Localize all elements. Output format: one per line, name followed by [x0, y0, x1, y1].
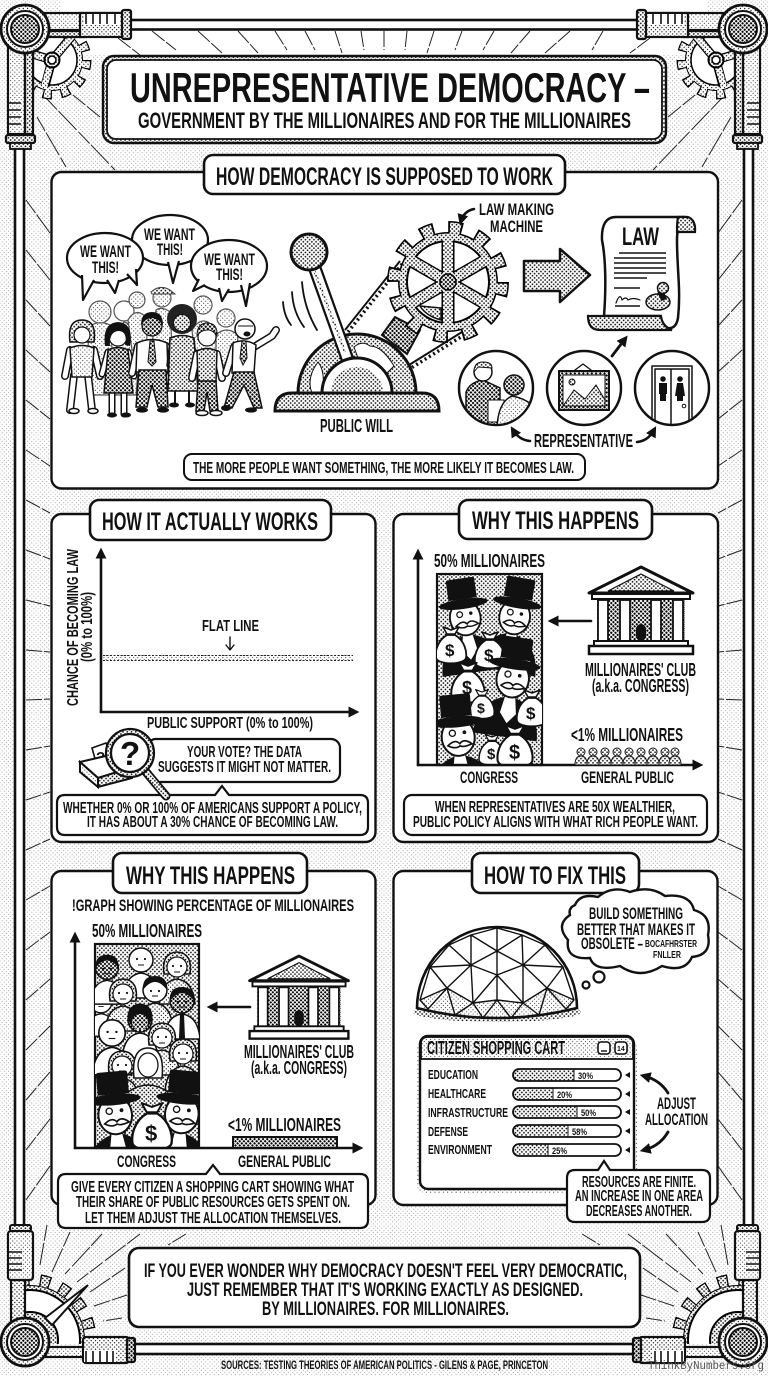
row: education: EDUCATION — [428, 1067, 478, 1082]
icon: capitol building — [589, 567, 693, 654]
window buttons: 14 — [617, 1046, 625, 1053]
heading — [113, 853, 307, 893]
flat line chart: CHANCE OF BECOMING LAW — [65, 549, 82, 706]
speech bubble 3: THIS! — [216, 266, 243, 284]
heading: HOW TO FIX THIS — [484, 862, 626, 890]
mogul — [438, 694, 482, 764]
label: law making machine — [461, 201, 554, 236]
motion lines — [283, 282, 317, 330]
person 6 pointing — [221, 319, 276, 413]
heading — [472, 853, 639, 893]
lever and law making machine — [275, 228, 502, 411]
closing statement: BY MILLIONAIRES. FOR MILLIONAIRES. — [262, 1298, 509, 1320]
stamp — [646, 282, 670, 310]
inner hub — [322, 358, 392, 393]
ballot box and magnifier — [80, 729, 166, 796]
person 2 — [102, 322, 134, 418]
label: 50% millionaires: 50% MILLIONAIRES — [434, 551, 545, 571]
money bags — [479, 726, 533, 767]
panel: how to fix this — [394, 853, 718, 1222]
flat line chart: PUBLIC SUPPORT (0% to 100%) — [147, 715, 313, 732]
arrow — [552, 620, 591, 622]
row: healthcare: 20% — [557, 1090, 572, 1100]
label: law making machine: LAW MAKING — [479, 201, 554, 219]
arrow to law — [612, 339, 625, 356]
heading: WHY THIS HAPPENS — [472, 507, 639, 535]
heading: WHY THIS HAPPENS — [126, 862, 295, 890]
person 5 — [192, 323, 222, 416]
row: healthcare — [428, 1086, 630, 1101]
speech bubble 1 — [67, 233, 143, 300]
row: education: 30% — [578, 1071, 593, 1081]
heading — [459, 500, 652, 539]
money bags: $ — [526, 704, 536, 723]
label: adjust allocation: ADJUST — [657, 1094, 696, 1113]
callout: your vote: YOUR VOTE? THE DATA — [187, 744, 302, 761]
row: defense: DEFENSE — [428, 1124, 468, 1139]
corner: top right — [637, 5, 767, 149]
label: millionaires club — [585, 660, 696, 696]
callout: your vote — [147, 739, 340, 782]
labels: x axis: CONGRESS — [117, 1152, 176, 1171]
law scroll: LAW — [622, 223, 659, 251]
money bags — [436, 627, 505, 703]
caption — [404, 795, 707, 835]
thought cloud: BOCAFHRSTER — [645, 938, 697, 950]
flat line chart: FLAT LINE — [202, 618, 259, 635]
thought cloud: BUILD SOMETHING — [589, 904, 683, 923]
caption: THEIR SHARE OF PUBLIC RESOURCES GETS SPENT ON. — [76, 1194, 350, 1211]
caption: LET THEM ADJUST THE ALLOCATION THEMSELVES. — [85, 1210, 341, 1227]
money bags: $ — [462, 678, 472, 698]
speech bubble 3: WE WANT — [204, 251, 255, 269]
person 4 — [167, 304, 198, 408]
crowd of citizens — [65, 287, 276, 418]
label: representative — [513, 430, 654, 451]
speech bubble 2: THIS! — [157, 241, 183, 259]
money bags: $ — [445, 641, 455, 660]
ballot box and magnifier: ? — [120, 735, 140, 772]
money bag: $ — [145, 1121, 157, 1146]
corner: bottom right — [633, 1225, 768, 1376]
labels: x axis: GENERAL PUBLIC — [581, 768, 674, 787]
money bags — [470, 690, 547, 726]
bar: general public — [233, 1137, 337, 1148]
label: adjust allocation: ALLOCATION — [645, 1110, 708, 1129]
thought cloud — [562, 889, 709, 988]
caption: GIVE EVERY CITIZEN A SHOPPING CART SHOWING WHAT — [71, 1179, 354, 1196]
representative circle: restroom doors — [635, 351, 709, 428]
row: infrastructure — [428, 1105, 630, 1120]
money bags: $ — [484, 646, 494, 665]
row: environment: 25% — [552, 1146, 567, 1156]
labels: x axis: CONGRESS — [460, 768, 518, 787]
axes — [75, 936, 359, 1148]
heading: HOW DEMOCRACY IS SUPPOSED TO WORK — [216, 163, 553, 191]
sources: SOURCES: TESTING THEORIES OF AMERICAN POLITICS - GILENS & PAGE, PRINCETON — [221, 1358, 548, 1372]
money bags: $ — [477, 700, 485, 716]
thought cloud: OBSOLETE – — [581, 934, 643, 953]
speech bubble 2 — [132, 215, 208, 283]
law scroll — [588, 217, 695, 330]
label: under 1% millionaires: <1% MILLIONAIRES — [228, 1115, 341, 1135]
axes — [418, 553, 699, 765]
row: infrastructure: 50% — [581, 1108, 596, 1118]
representative circle: meeting — [459, 351, 533, 428]
panel: why this happens (crowd) — [52, 853, 376, 1228]
caption — [57, 786, 368, 835]
label: law making machine: MACHINE — [490, 218, 543, 236]
row: defense — [428, 1124, 630, 1139]
label: adjust allocation — [644, 1076, 708, 1150]
dome — [298, 334, 416, 393]
label: millionaires club: MILLIONAIRES' CLUB — [585, 660, 696, 680]
mogul — [474, 636, 540, 742]
caption — [184, 454, 585, 480]
row: healthcare: HEALTHCARE — [428, 1086, 486, 1101]
speech bubble 2: WE WANT — [144, 226, 195, 244]
panel: why this happens (moguls) — [394, 500, 718, 842]
panel: how democracy is supposed to work — [52, 155, 718, 488]
gauge needle — [45, 1285, 88, 1325]
lever handle — [309, 252, 347, 358]
ballot box and magnifier: ? — [96, 749, 105, 766]
subheading: !GRAPH SHOWING PERCENTAGE OF MILLIONAIRES — [72, 897, 354, 915]
gear — [394, 228, 502, 336]
arrow — [211, 1006, 250, 1008]
labels: x axis: GENERAL PUBLIC — [238, 1152, 331, 1171]
mogul — [439, 576, 494, 677]
belts — [345, 261, 462, 375]
heading: HOW IT ACTUALLY WORKS — [102, 508, 318, 536]
big arrow — [524, 249, 590, 302]
mogul — [493, 576, 541, 677]
panel: how it actually works — [52, 500, 376, 842]
caption: THE MORE PEOPLE WANT SOMETHING, THE MORE LIKELY IT BECOMES LAW. — [193, 460, 574, 477]
corner: top left — [1, 5, 131, 149]
heading — [90, 500, 331, 540]
money bags: $ — [509, 742, 520, 764]
flat line chart: (0% to 100%) — [79, 592, 96, 662]
heading — [204, 155, 565, 194]
caption — [58, 1165, 368, 1228]
row: defense: 58% — [572, 1127, 587, 1137]
caption: WHETHER 0% OR 100% OF AMERICANS SUPPORT A POLICY, — [63, 800, 362, 817]
machine arm — [382, 317, 420, 354]
speech bubble 1: WE WANT — [80, 243, 131, 261]
thought cloud: FNLLER — [653, 949, 681, 961]
labels: x axis — [460, 768, 674, 787]
callout: resources are finite — [567, 1161, 710, 1222]
money bags: $ — [487, 746, 496, 763]
label: millionaires club: (a.k.a. CONGRESS) — [251, 1058, 347, 1078]
bar: congress crowd — [94, 942, 200, 1150]
bar: congress — [436, 572, 544, 766]
label: under 1% millionaires: <1% MILLIONAIRES — [571, 725, 683, 745]
window buttons — [598, 1042, 627, 1054]
closing statement — [129, 1248, 640, 1327]
citizen shopping cart window — [417, 1036, 637, 1193]
person 1 — [65, 320, 100, 414]
label: millionaires club: (a.k.a. CONGRESS) — [592, 676, 689, 696]
money bag — [132, 1103, 172, 1150]
labels: x axis — [117, 1152, 331, 1171]
label: 50% millionaires: 50% MILLIONAIRES — [92, 921, 202, 941]
row: education — [428, 1067, 630, 1082]
label: millionaires club — [244, 1042, 354, 1078]
representative circle: picture — [547, 351, 621, 425]
title block — [103, 56, 666, 143]
caption: IT HAS ABOUT A 30% CHANCE OF BECOMING LAW. — [87, 814, 338, 831]
row: environment: ENVIRONMENT — [428, 1142, 492, 1157]
speech bubble 3 — [191, 240, 267, 306]
label: millionaires club: MILLIONAIRES' CLUB — [244, 1042, 354, 1062]
corner: bottom left — [0, 1225, 135, 1376]
callout: resources are finite: DECREASES ANOTHER. — [586, 1203, 692, 1220]
row: infrastructure: INFRASTRUCTURE — [428, 1105, 508, 1120]
speech bubble 1: THIS! — [92, 259, 119, 277]
geodesic dome — [413, 927, 581, 1022]
lever ball — [291, 234, 327, 270]
mogul — [96, 1070, 141, 1147]
flat line chart — [65, 549, 355, 732]
label: public will: PUBLIC WILL — [320, 416, 393, 436]
icon: capitol building — [250, 956, 348, 1039]
base — [275, 393, 439, 411]
label: representative: REPRESENTATIVE — [534, 431, 633, 451]
callout: your vote: SUGGESTS IT MIGHT NOT MATTER. — [158, 759, 331, 776]
person 3 — [132, 312, 171, 413]
bar: general public crowd — [575, 748, 681, 765]
citizen shopping cart window: CITIZEN SHOPPING CART — [427, 1038, 565, 1058]
row: environment — [428, 1142, 630, 1157]
mogul — [156, 1070, 199, 1147]
